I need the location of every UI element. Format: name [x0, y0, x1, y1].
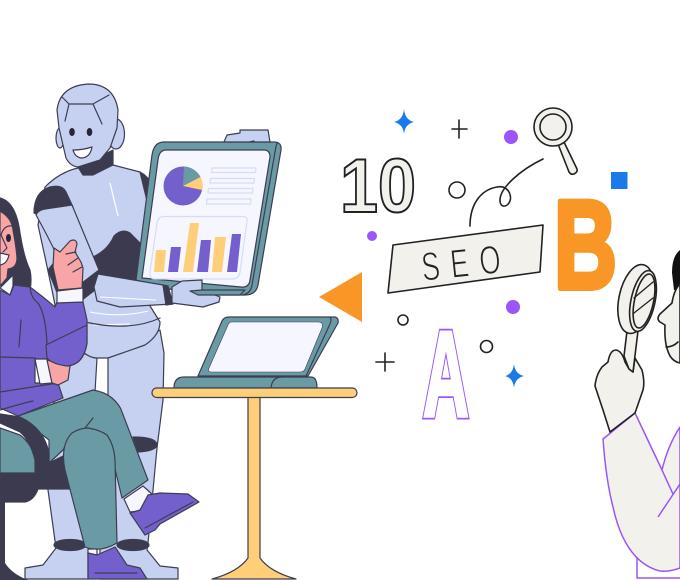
robot knee joints: [54, 437, 157, 550]
back shoe: [88, 547, 147, 579]
facial features: [0, 226, 12, 265]
face: [0, 211, 17, 286]
open circle: [449, 182, 465, 198]
robot fingers on tablet: [224, 130, 270, 142]
laptop base: [174, 377, 317, 388]
hair: [672, 250, 680, 290]
purple dot lower: [506, 300, 520, 314]
robot head: [57, 84, 118, 167]
plus top: [452, 120, 467, 138]
forearm highlight: [100, 297, 156, 300]
pie chart: [164, 166, 203, 206]
purple dot small: [367, 231, 377, 241]
robot torso: [38, 165, 160, 358]
SEO banner: SEO: [419, 237, 514, 290]
back sock: [88, 549, 97, 555]
chair seat: [0, 456, 75, 502]
laptop lid: [198, 317, 338, 376]
magnifier: [612, 261, 661, 337]
chair back post: [0, 502, 28, 580]
raised hand: [53, 240, 83, 290]
robot face: [62, 95, 109, 158]
table stem: [212, 397, 296, 579]
robot: [25, 84, 281, 579]
robot neck: [78, 150, 113, 175]
robot highlight: [110, 183, 118, 216]
laptop: [174, 317, 338, 388]
magnifier handle: [624, 331, 638, 372]
number 10: 10: [340, 144, 416, 229]
robot legs: [25, 330, 178, 579]
coat: [603, 413, 680, 571]
robot ears: [56, 119, 124, 149]
blue square: [611, 172, 628, 189]
back leg: [64, 428, 117, 549]
laptop screen: [208, 322, 322, 372]
tablet screen: [142, 150, 270, 287]
robot upper arm: [36, 205, 99, 283]
small circle right: [480, 340, 492, 352]
robot forearm: [94, 274, 172, 307]
seated thigh: [0, 428, 35, 473]
blue star lower: [505, 364, 524, 388]
robot dark waist band: [48, 231, 140, 300]
front thigh: [18, 390, 148, 498]
orange triangle: [319, 272, 362, 322]
hair: [0, 198, 31, 292]
robot dark shoulder: [34, 172, 152, 214]
letter A: A: [423, 306, 469, 442]
person with magnifier: [595, 250, 680, 578]
lower cuff: [35, 359, 52, 384]
blue star top: [394, 109, 414, 134]
curly arrow line: [470, 159, 543, 226]
lower hand: [47, 360, 70, 385]
table: [152, 388, 357, 579]
bar chart: [150, 216, 247, 279]
smile: [666, 342, 678, 347]
arm over hand: [46, 325, 87, 366]
plus lower: [376, 353, 394, 371]
front shoe: [130, 493, 199, 535]
chair arm: [0, 414, 49, 473]
sock: [124, 486, 153, 512]
legend lines: [206, 168, 256, 204]
woman: [0, 198, 199, 580]
face: [658, 284, 680, 363]
raised cuff: [57, 288, 83, 303]
robot wrist: [163, 285, 173, 305]
hand: [595, 350, 644, 432]
sweater: [0, 285, 87, 416]
sweater details: [0, 287, 58, 410]
table top: [152, 388, 357, 398]
tablet: [136, 142, 281, 295]
robot hand: [172, 280, 220, 307]
collar: [0, 275, 13, 295]
robot lower body lines: [85, 311, 160, 326]
SEO banner: [388, 225, 543, 293]
letter B: B: [554, 174, 617, 315]
purple dot top: [504, 130, 518, 144]
tablet frame: [136, 142, 281, 295]
coat lines: [637, 470, 680, 578]
magnifying glass icon: [534, 108, 577, 174]
laptop hinge: [271, 377, 282, 388]
small circle left: [398, 315, 408, 325]
letter A: A: [423, 306, 469, 442]
